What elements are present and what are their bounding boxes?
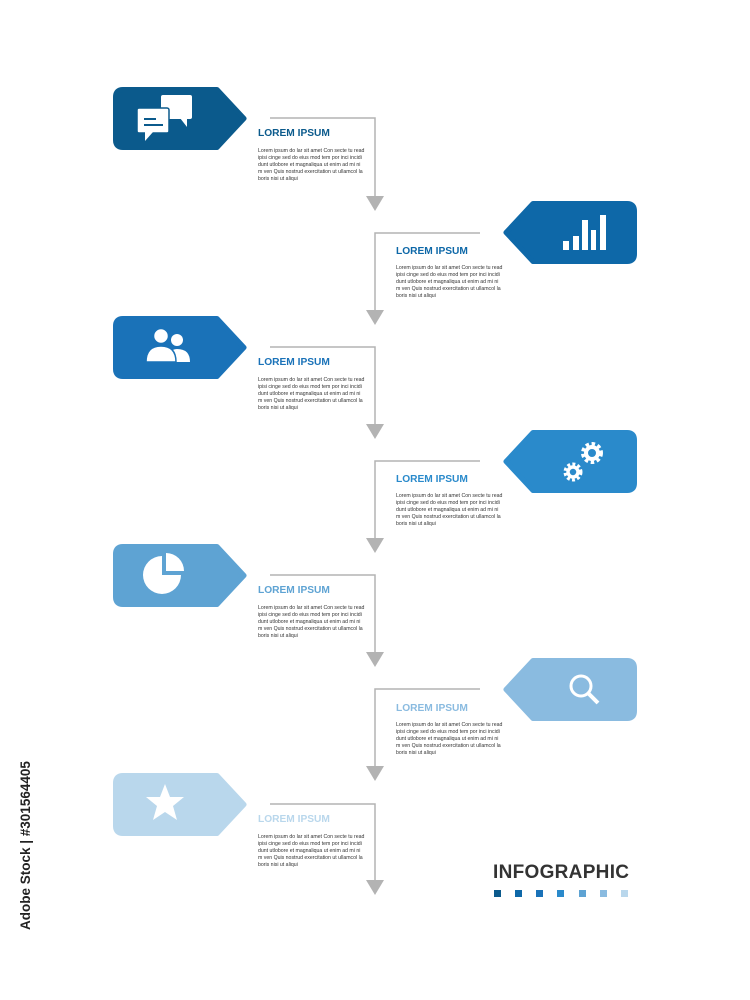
step 6: search (366, 660, 634, 781)
step 5: pie chart (116, 546, 384, 667)
step 6: search: ipisi cinge sed do eius mod tem por inci incidi (396, 729, 500, 735)
step 5: pie chart: dunt utlobore et magnaliqua ut enim ad mi ni (258, 619, 360, 625)
step 7: star: boris nisi ut aliqui (258, 862, 298, 868)
title: INFOGRAPHIC (493, 862, 629, 897)
step 4: gears: Lorem ipsum do lar sit amet Con secte tu read (396, 493, 503, 499)
icon: gears (566, 445, 600, 479)
step 1: chat (116, 90, 384, 211)
step 1: chat: m ven Quis nostrud exercitation ut ullamcol la (258, 169, 363, 175)
step 6: search: Lorem ipsum do lar sit amet Con secte tu read (396, 722, 503, 728)
legend squares (494, 890, 628, 897)
step 4: gears: m ven Quis nostrud exercitation ut ullamcol la (396, 514, 501, 520)
step 3: people: dunt utlobore et magnaliqua ut enim ad mi ni (258, 391, 360, 397)
icon: magnifier (571, 676, 598, 703)
step 5: pie chart: boris nisi ut aliqui (258, 633, 298, 639)
step 6: search: LOREM IPSUM (396, 703, 468, 714)
step 5: pie chart: LOREM IPSUM (258, 585, 330, 596)
icon: bars (563, 215, 606, 250)
step 2: bar chart: m ven Quis nostrud exercitation ut ullamcol la (396, 286, 501, 292)
step 5: pie chart: ipisi cinge sed do eius mod tem por inci incidi (258, 612, 362, 618)
step 2: bar chart: dunt utlobore et magnaliqua ut enim ad mi ni (396, 279, 498, 285)
step 7: star: m ven Quis nostrud exercitation ut ullamcol la (258, 855, 363, 861)
step 1: chat: ipisi cinge sed do eius mod tem por inci incidi (258, 155, 362, 161)
step 7: star: ipisi cinge sed do eius mod tem por inci incidi (258, 841, 362, 847)
step 4: gears: dunt utlobore et magnaliqua ut enim ad mi ni (396, 507, 498, 513)
step 2: bar chart: boris nisi ut aliqui (396, 293, 436, 299)
step 3: people: LOREM IPSUM (258, 357, 330, 368)
step 7: star: dunt utlobore et magnaliqua ut enim ad mi ni (258, 848, 360, 854)
step 7: star: Lorem ipsum do lar sit amet Con secte tu read (258, 834, 365, 840)
step 2: bar chart: Lorem ipsum do lar sit amet Con secte tu read (396, 265, 503, 271)
step 6: search: m ven Quis nostrud exercitation ut ullamcol la (396, 743, 501, 749)
step 1: chat: LOREM IPSUM (258, 128, 330, 139)
step 5: pie chart: Lorem ipsum do lar sit amet Con secte tu read (258, 605, 365, 611)
step 1: chat: dunt utlobore et magnaliqua ut enim ad mi ni (258, 162, 360, 168)
step 3: people: m ven Quis nostrud exercitation ut ullamcol la (258, 398, 363, 404)
step 2: bar chart: ipisi cinge sed do eius mod tem por inci incidi (396, 272, 500, 278)
icon: users (146, 328, 190, 362)
step 3: people: ipisi cinge sed do eius mod tem por inci incidi (258, 384, 362, 390)
step 3: people (116, 318, 384, 439)
watermark side text: Adobe Stock | #301564405 (18, 761, 33, 930)
step 7: star (116, 776, 384, 895)
step 3: people: boris nisi ut aliqui (258, 405, 298, 411)
step 2: bar chart (366, 204, 634, 325)
step 2: bar chart: LOREM IPSUM (396, 246, 468, 257)
icon: star (146, 784, 184, 820)
step 6: search: dunt utlobore et magnaliqua ut enim ad mi ni (396, 736, 498, 742)
icon: pie (143, 553, 184, 594)
step 4: gears (366, 432, 634, 553)
step 1: chat: Lorem ipsum do lar sit amet Con secte tu read (258, 148, 365, 154)
step 7: star: LOREM IPSUM (258, 814, 330, 825)
title: INFOGRAPHIC: INFOGRAPHIC (493, 862, 629, 883)
step 4: gears: ipisi cinge sed do eius mod tem por inci incidi (396, 500, 500, 506)
step 1: chat: boris nisi ut aliqui (258, 176, 298, 182)
step 4: gears: boris nisi ut aliqui (396, 521, 436, 527)
icon: chat bubbles (137, 95, 192, 141)
step 6: search: boris nisi ut aliqui (396, 750, 436, 756)
step 4: gears: LOREM IPSUM (396, 474, 468, 485)
step 3: people: Lorem ipsum do lar sit amet Con secte tu read (258, 377, 365, 383)
step 5: pie chart: m ven Quis nostrud exercitation ut ullamcol la (258, 626, 363, 632)
